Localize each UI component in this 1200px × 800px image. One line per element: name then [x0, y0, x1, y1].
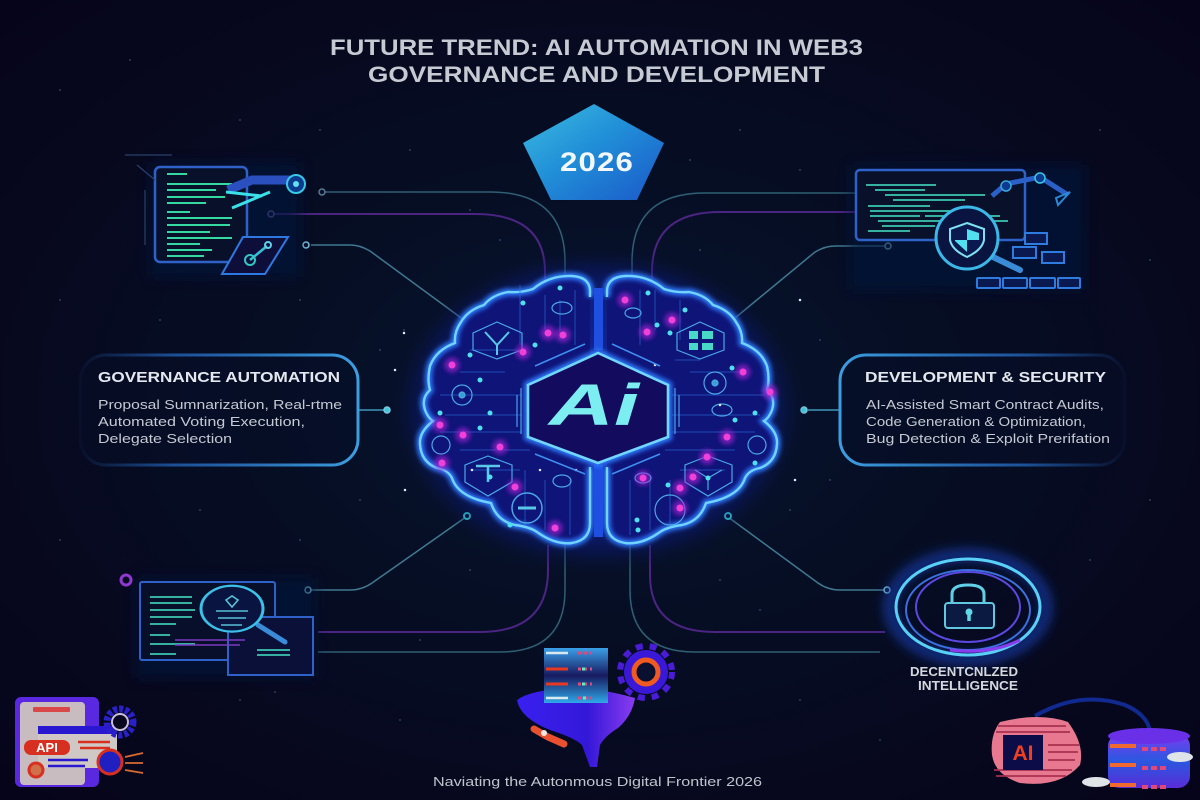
- icon: code review windows with magnifier: [121, 575, 315, 678]
- text: development items: [866, 398, 1110, 446]
- white sparks: [395, 300, 800, 490]
- title: FUTURE TREND: AI AUTOMATION IN WEB3: [330, 35, 863, 60]
- text: governance items: Proposal Sumnarization, Real-rtme: [98, 398, 342, 412]
- icon: AI chip brain and database: [992, 700, 1193, 788]
- code lines: [150, 597, 290, 655]
- magnifier: [201, 586, 285, 642]
- heading: governance automation: GOVERNANCE AUTOMATION: [98, 369, 340, 386]
- text: development items: Code Generation & Optimization,: [866, 415, 1086, 429]
- label: decentralized intelligence: [910, 664, 1018, 693]
- gear orange ring: [620, 646, 672, 698]
- title: [330, 35, 863, 87]
- bug alert: [98, 750, 143, 774]
- database: [1108, 728, 1190, 788]
- robot arm: [226, 175, 305, 208]
- API label: API: [36, 740, 58, 755]
- background star dots: [60, 60, 1150, 740]
- chip: AI: [1012, 742, 1034, 765]
- robot arm: [992, 173, 1070, 205]
- icon: code window with shield magnifier and robot arm: [850, 165, 1085, 290]
- code lines: [167, 174, 232, 256]
- clouds: [1082, 752, 1193, 787]
- chip: [1003, 735, 1043, 770]
- magnifier with shield: [936, 207, 1020, 270]
- circuit block row: [977, 233, 1080, 288]
- text: governance items: Automated Voting Execution,: [98, 415, 305, 429]
- text: development items: AI-Assisted Smart Contract Audits,: [866, 398, 1104, 412]
- text: governance items: [98, 398, 342, 446]
- left hemisphere: [420, 276, 590, 543]
- footer text: Naviating the Autonmous Digital Frontier 2026: [433, 774, 762, 789]
- check card: [222, 237, 288, 274]
- pink brain: [992, 717, 1081, 784]
- connector nodes: [268, 189, 891, 593]
- connector lines: [272, 192, 887, 652]
- icon: decentralized lock rings: [890, 555, 1046, 659]
- text: governance items: Delegate Selection: [98, 432, 232, 446]
- label: decentralized intelligence: INTELLIGENCE: [918, 678, 1018, 693]
- text: development items: Bug Detection & Exploit Prerifation: [866, 432, 1110, 446]
- icon: API document: [15, 697, 143, 787]
- small orange gear: [534, 729, 564, 744]
- panel: governance automation: [80, 355, 358, 465]
- label: Ai: Ai: [546, 373, 642, 438]
- padlock: [945, 585, 994, 628]
- central spine: [594, 288, 603, 537]
- gear: [107, 709, 133, 735]
- icon: document with robot arm and checkmark: [125, 155, 305, 277]
- hexagon circuit icons: [432, 302, 766, 525]
- year badge pentagon: [523, 104, 664, 200]
- magenta node glow: [440, 300, 770, 528]
- circuit traces: [440, 285, 765, 535]
- central hexagon: [517, 344, 679, 474]
- brain: [390, 247, 806, 573]
- code lines: [866, 185, 1008, 231]
- server stack: [544, 648, 608, 703]
- funnel body: [517, 688, 635, 767]
- heading: development and security: DEVELOPMENT & SECURITY: [865, 369, 1106, 386]
- magenta nodes: [440, 300, 770, 528]
- year badge pentagon: 2026: [560, 147, 634, 177]
- title: GOVERNANCE AND DEVELOPMENT: [368, 62, 826, 87]
- right hemisphere: [607, 276, 777, 543]
- panel: development and security: [840, 355, 1125, 465]
- label: decentralized intelligence: DECENTCNLZED: [910, 664, 1018, 679]
- cyan nodes: [440, 288, 755, 530]
- icon: database funnel: [517, 646, 672, 767]
